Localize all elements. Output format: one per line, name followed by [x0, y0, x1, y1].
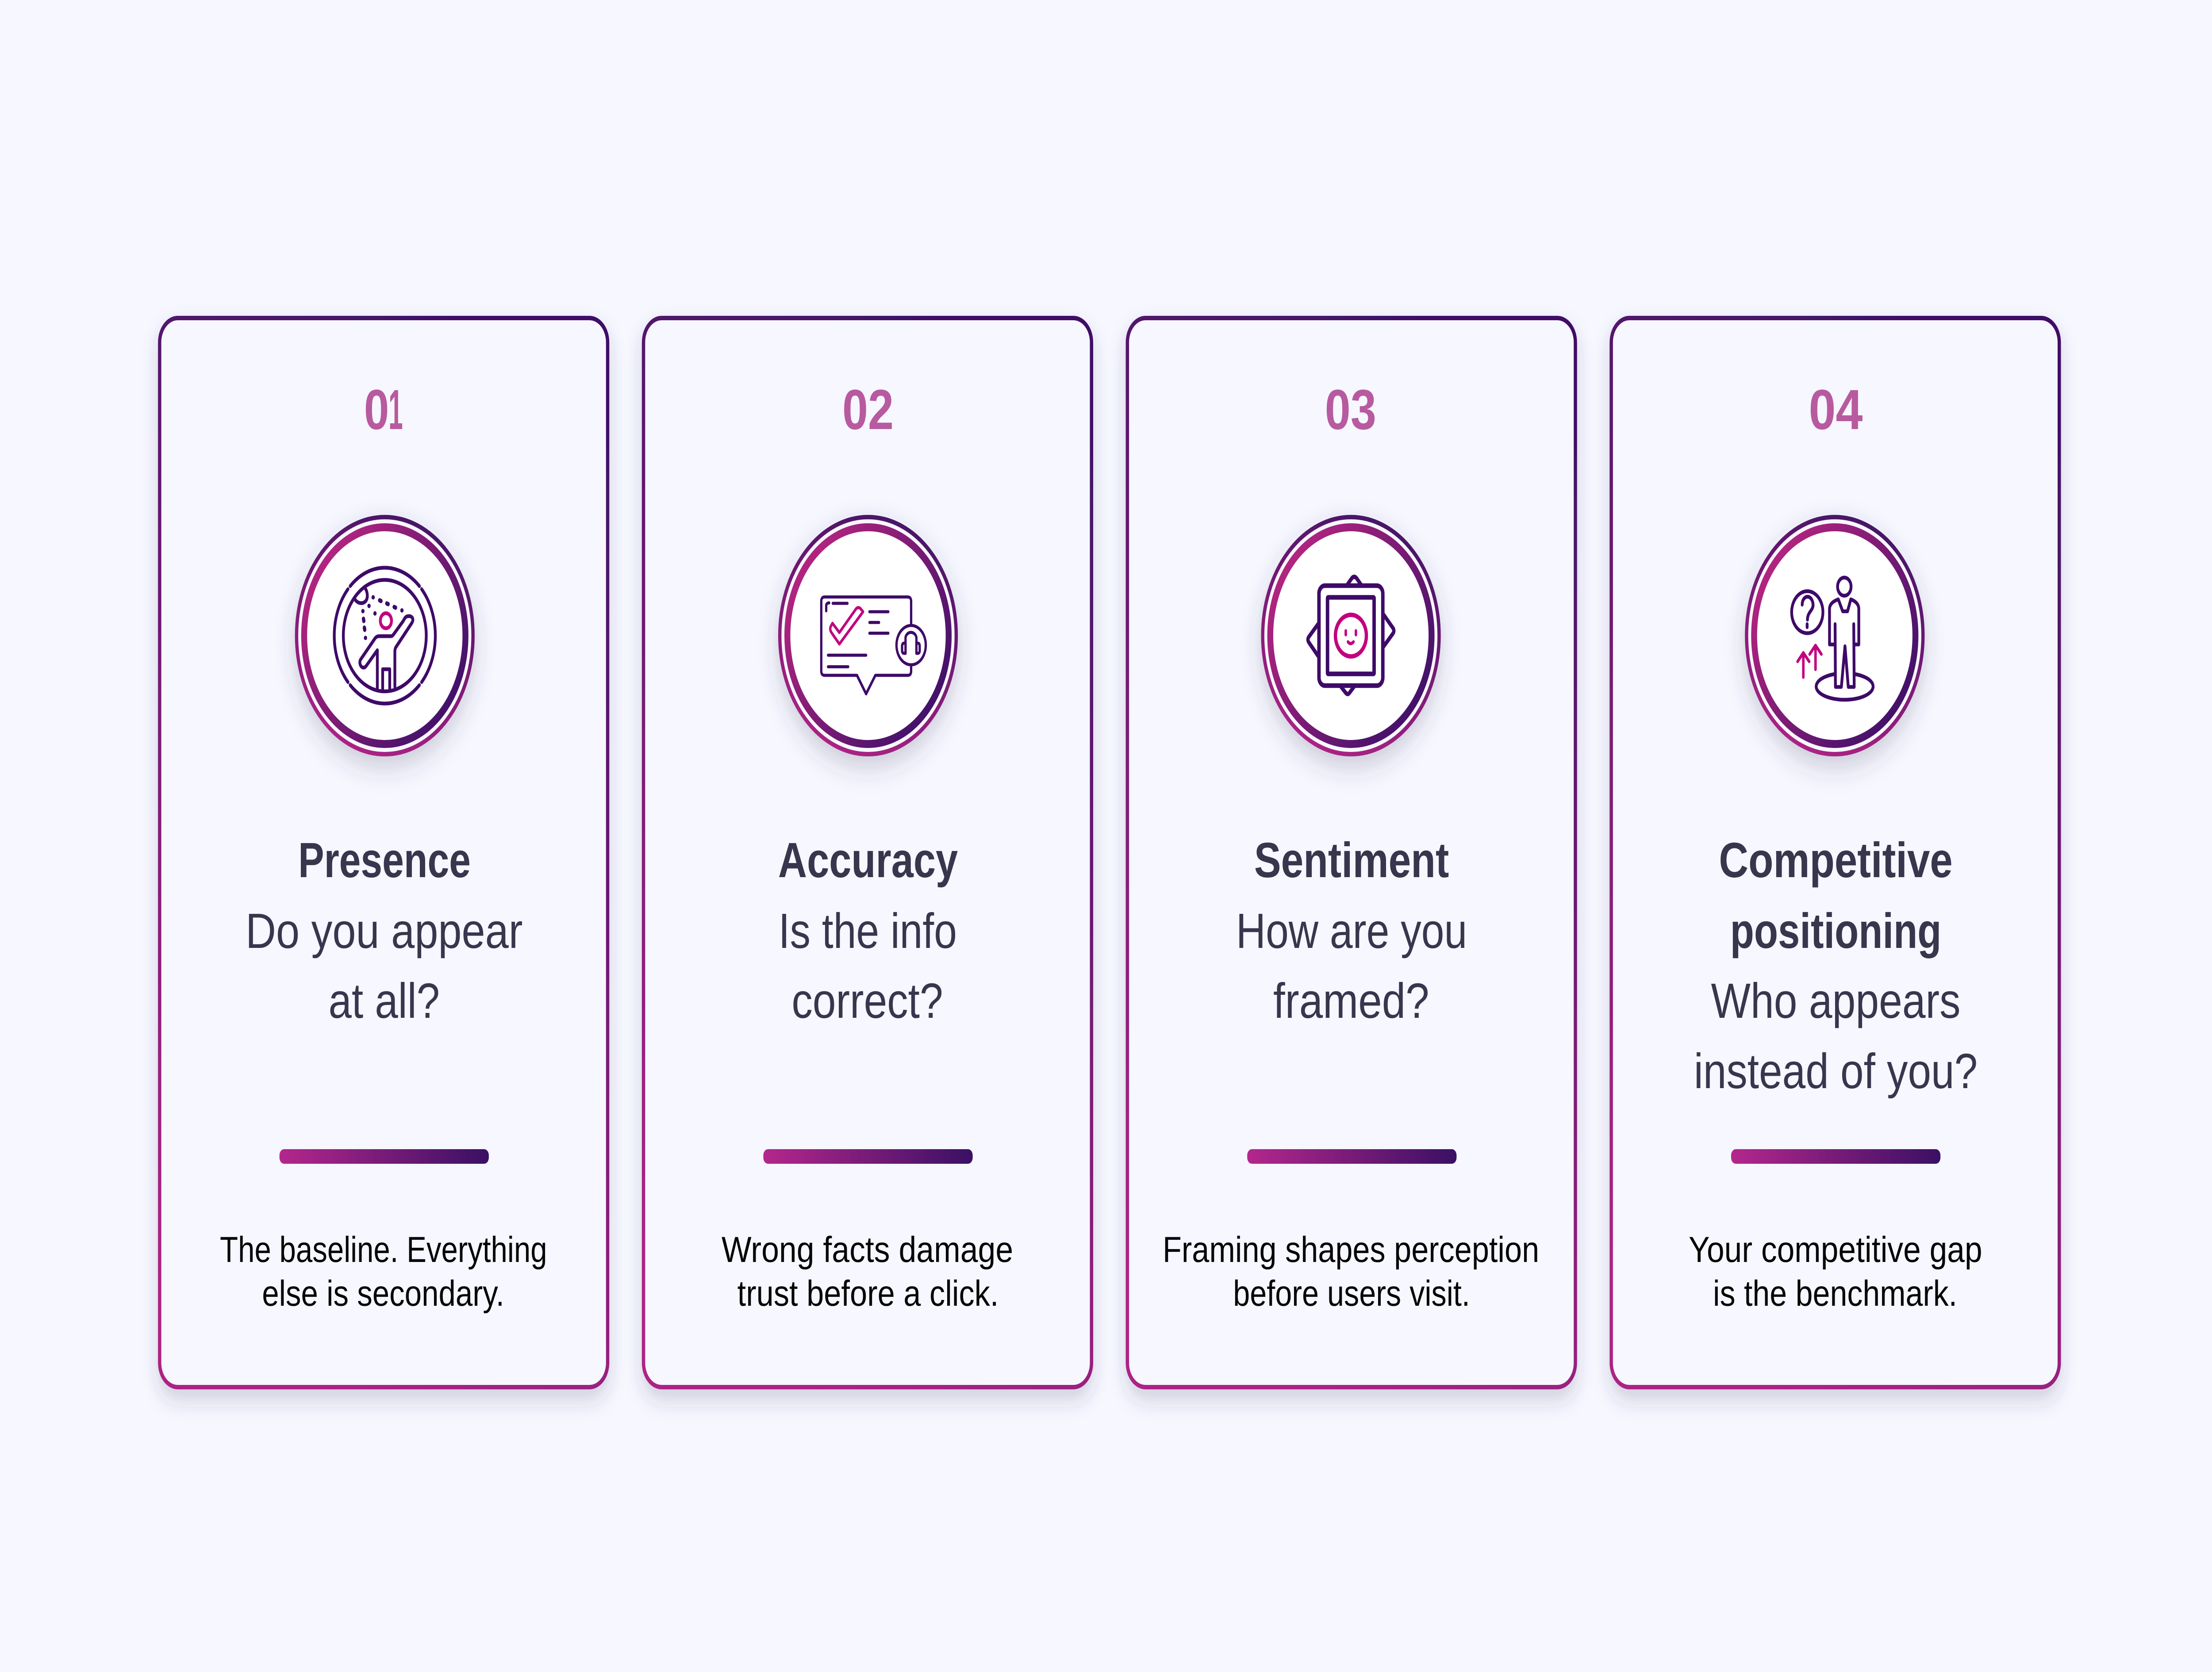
step number 01: 0 [364, 378, 389, 441]
question text [1236, 903, 1467, 1028]
question text [246, 903, 523, 1028]
question text: Do you appear [246, 903, 523, 959]
question text: Who appears [1711, 973, 1961, 1028]
gradient divider bar [280, 1149, 489, 1164]
step number 01: 1 [388, 378, 403, 441]
description text [1163, 1230, 1539, 1314]
description text: Framing shapes perception [1163, 1230, 1539, 1270]
gradient divider bar [1247, 1149, 1456, 1164]
question text [1694, 973, 1978, 1099]
icon badge: presence [296, 517, 473, 754]
description text: trust before a click. [737, 1273, 998, 1314]
description text [1689, 1230, 1982, 1314]
heading: Competitive positioning: positioning [1730, 903, 1941, 959]
heading: Competitive positioning [1719, 832, 1953, 959]
step number 03: 03 [1325, 378, 1376, 441]
icon: person under spotlight [334, 568, 435, 704]
heading: Accuracy: Accuracy [778, 832, 958, 888]
card frame [160, 318, 608, 1387]
card 3: Sentiment [1127, 318, 1575, 1387]
question text: Is the info [779, 903, 957, 959]
question text: How are you [1236, 903, 1467, 959]
step number 02: 02 [842, 378, 894, 441]
heading: Presence: Presence [298, 832, 471, 888]
icon badge: sentiment [1263, 517, 1439, 754]
card 1: Presence [160, 318, 608, 1387]
heading: Sentiment: Sentiment [1254, 832, 1449, 888]
description text: The baseline. Everything [220, 1230, 547, 1270]
description text: before users visit. [1233, 1273, 1470, 1314]
heading: Competitive positioning: Competitive [1719, 832, 1953, 888]
icon: checked speech bubble with headset [821, 597, 926, 694]
question text: correct? [791, 973, 943, 1028]
card frame [644, 318, 1091, 1387]
description text: Wrong facts damage [722, 1230, 1013, 1270]
question text [779, 903, 957, 1028]
icon: person on platform with question mark and arrows [1792, 578, 1873, 700]
description text [722, 1230, 1013, 1314]
description text: Your competitive gap [1689, 1230, 1982, 1270]
gradient divider bar [763, 1149, 973, 1164]
question text: at all? [329, 973, 440, 1028]
card frame [1127, 318, 1575, 1387]
question text: instead of you? [1694, 1043, 1978, 1099]
description text: else is secondary. [262, 1273, 504, 1314]
question text: framed? [1273, 973, 1429, 1028]
icon: framed smiley card [1308, 577, 1394, 694]
icon badge: competitive positioning [1747, 517, 1923, 754]
card frame [1611, 318, 2059, 1387]
description text: is the benchmark. [1713, 1273, 1957, 1314]
description text [220, 1230, 547, 1314]
icon badge: accuracy [780, 517, 956, 754]
step number 04: 04 [1809, 378, 1863, 441]
card 2: Accuracy [644, 318, 1091, 1387]
card 4: Competitive positioning [1611, 318, 2059, 1387]
gradient divider bar [1731, 1149, 1940, 1164]
